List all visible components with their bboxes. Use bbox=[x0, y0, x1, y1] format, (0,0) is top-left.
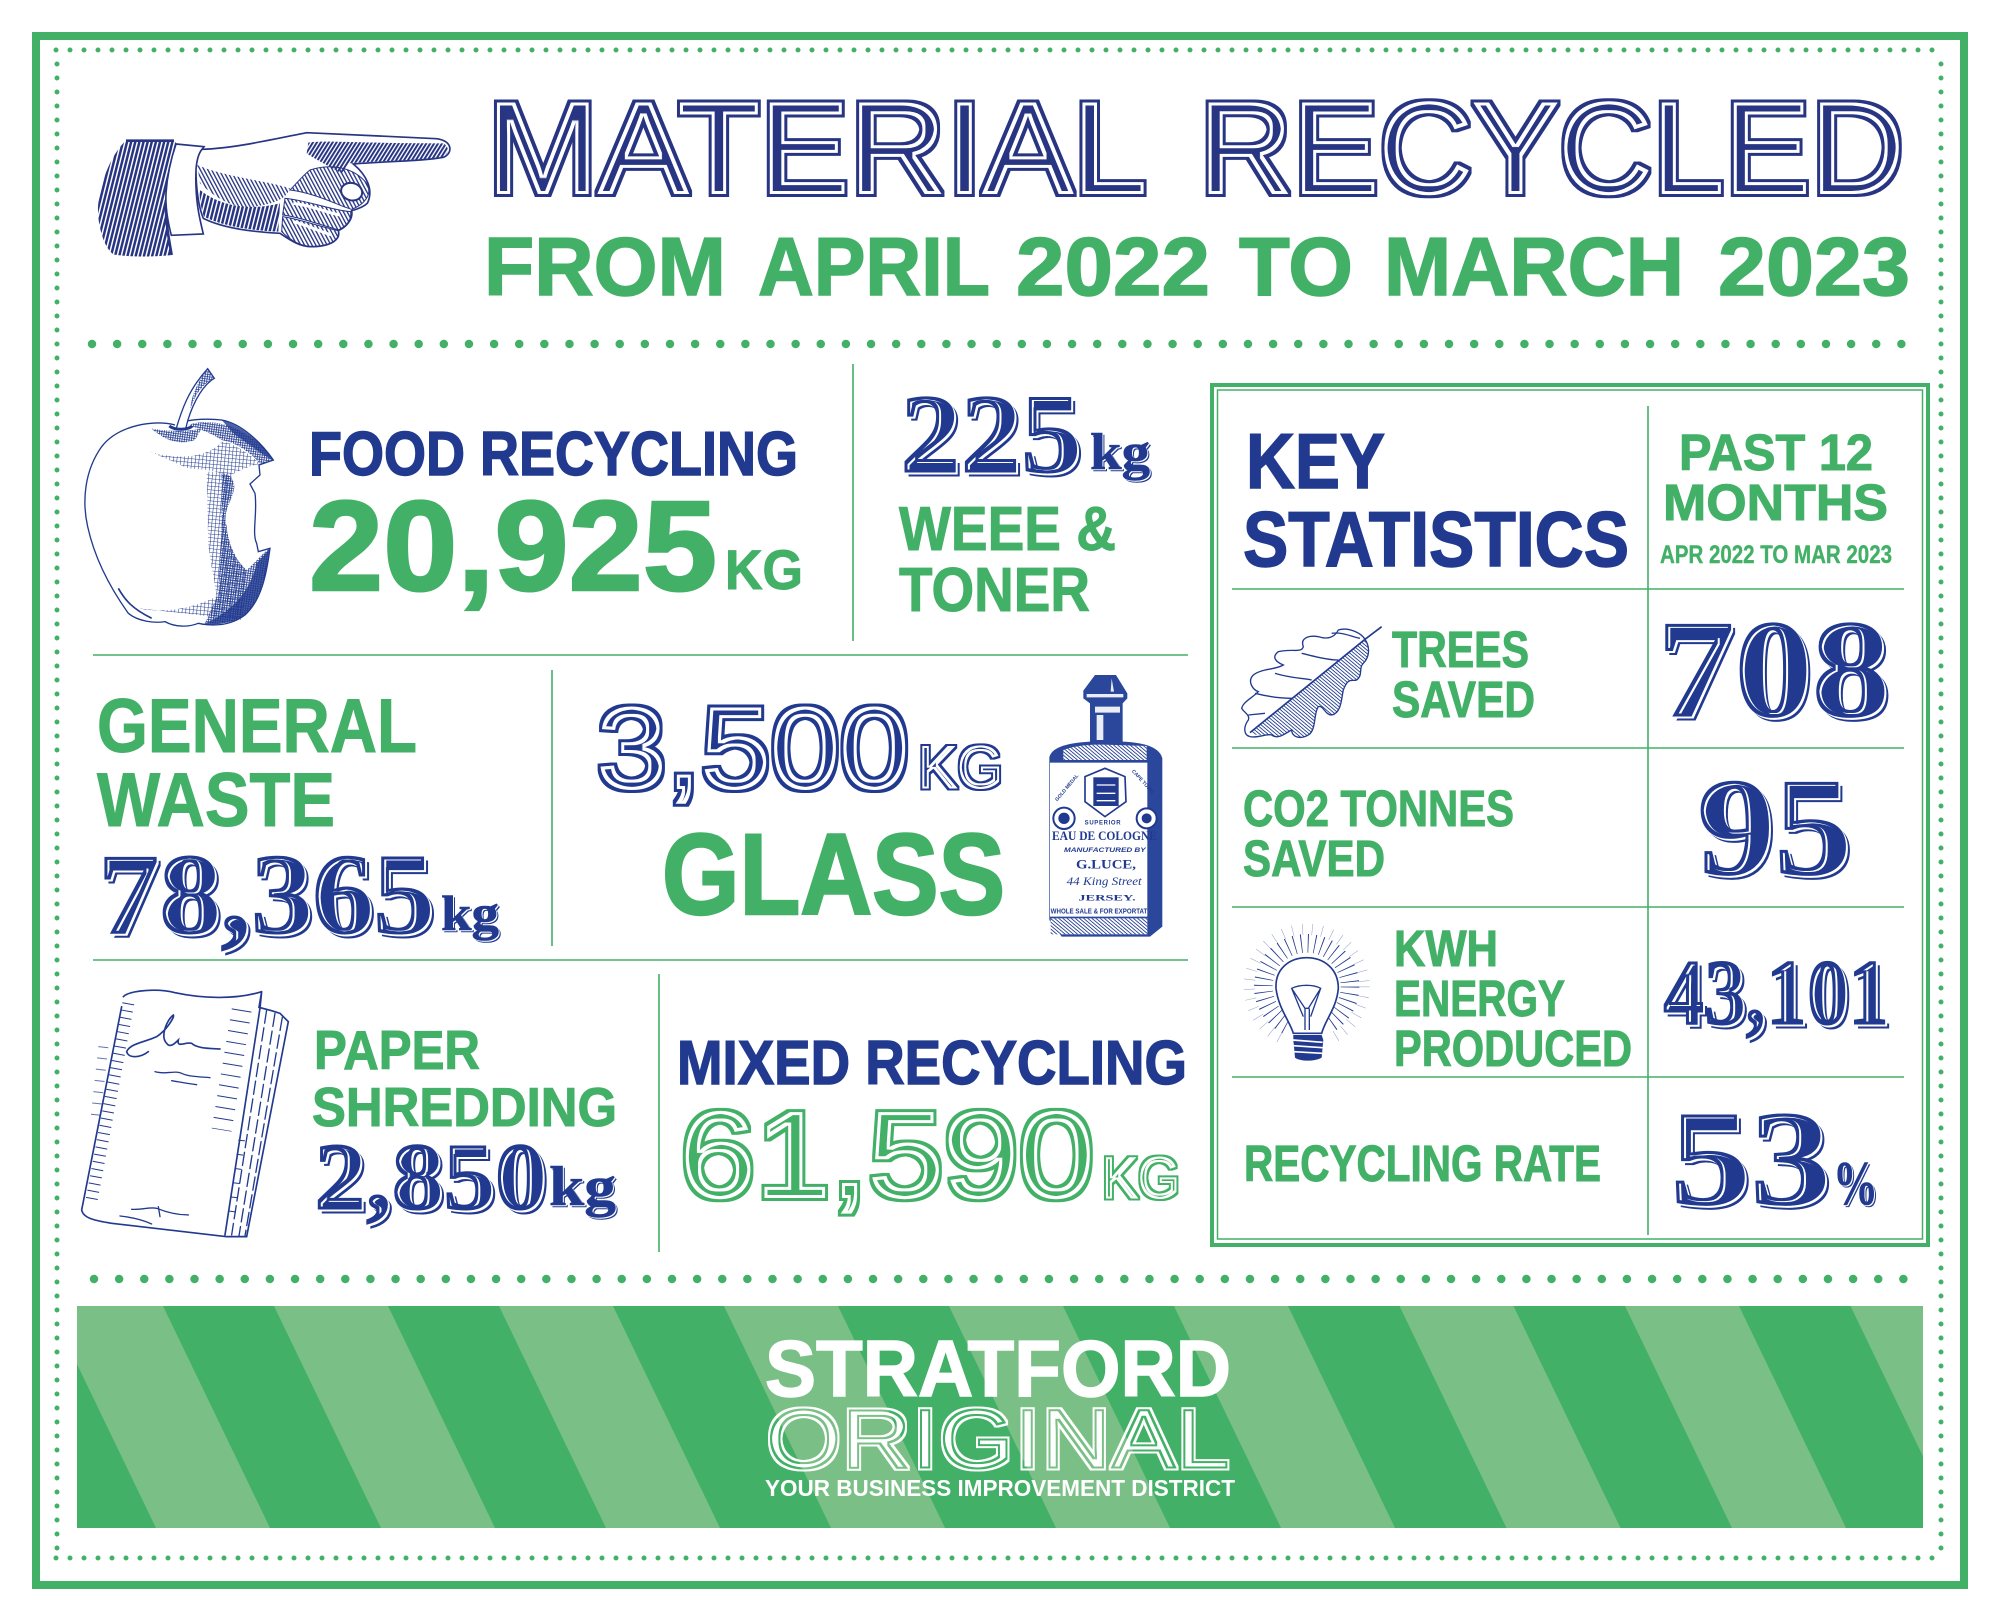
divider bbox=[93, 654, 1188, 656]
label: CO2 tonnes saved: CO2 TONNES bbox=[1243, 780, 1514, 837]
stat: general waste: WASTE bbox=[97, 758, 335, 843]
label: trees saved: SAVED bbox=[1392, 671, 1535, 728]
heading: past 12 months bbox=[1660, 424, 1892, 569]
icon: oak leaf bbox=[1242, 627, 1382, 737]
label: CO2 tonnes saved: SAVED bbox=[1243, 830, 1385, 887]
title: Material Recycled: MATERIAL bbox=[487, 75, 1147, 221]
icon: cologne bottle bbox=[1049, 675, 1162, 937]
stat: food recycling bbox=[309, 420, 803, 618]
icon: paper stack bbox=[82, 990, 288, 1237]
icon: bitten apple bbox=[85, 369, 274, 626]
value: 43,101: 43,101 bbox=[1663, 941, 1889, 1045]
value: 53% bbox=[1670, 1084, 1878, 1234]
heading: past 12 months: PAST 12 bbox=[1679, 424, 1873, 481]
value: 53%: 53 bbox=[1670, 1084, 1830, 1234]
divider bbox=[551, 670, 553, 946]
logo: Stratford Original bbox=[765, 1324, 1235, 1501]
heading: key statistics: STATISTICS bbox=[1243, 495, 1629, 583]
icon: cologne bottle: SUPERIOR bbox=[1085, 820, 1121, 826]
icon: cologne bottle: G.LUCE, bbox=[1076, 858, 1136, 872]
logo: Stratford Original: STRATFORD bbox=[765, 1324, 1231, 1413]
stat: WEEE and toner: 225 bbox=[900, 372, 1081, 497]
banner: striped footer bbox=[49, 1306, 2000, 1528]
stat: glass: GLASS bbox=[662, 811, 1005, 939]
label: trees saved: TREES bbox=[1392, 621, 1529, 678]
logo: Stratford Original: YOUR BUSINESS IMPROVEMENT DISTRICT bbox=[765, 1475, 1235, 1501]
divider bbox=[852, 364, 854, 641]
heading: past 12 months: MONTHS bbox=[1663, 474, 1888, 531]
stat: glass bbox=[597, 685, 1005, 939]
stat: mixed recycling: MIXED RECYCLING bbox=[677, 1029, 1187, 1098]
title: Material Recycled bbox=[487, 75, 1904, 221]
subtitle: date range: 2023 bbox=[1718, 220, 1910, 313]
stat: mixed recycling: KG bbox=[1102, 1146, 1180, 1211]
subtitle: date range: APRIL bbox=[758, 220, 990, 313]
icon: light bulb bbox=[1249, 929, 1364, 1061]
stat: general waste: GENERAL bbox=[97, 684, 417, 769]
stat: WEEE and toner: kg bbox=[1090, 424, 1150, 481]
icon: pointing hand bbox=[98, 133, 450, 256]
divider bbox=[658, 974, 660, 1252]
subtitle: date range: MARCH bbox=[1384, 220, 1684, 313]
divider bbox=[93, 959, 1188, 961]
logo: Stratford Original: ORIGINAL bbox=[766, 1392, 1230, 1486]
stat: glass: KG bbox=[918, 734, 1003, 801]
stat: general waste bbox=[97, 684, 499, 959]
title: Material Recycled: RECYCLED bbox=[1199, 75, 1904, 221]
icon: cologne bottle: GOLD MEDAL bbox=[1054, 773, 1080, 803]
heading: key statistics: KEY bbox=[1246, 417, 1385, 505]
stat: paper shredding: 2,850 bbox=[314, 1123, 546, 1230]
stat: paper shredding: SHREDDING bbox=[312, 1076, 617, 1138]
stat: WEEE and toner: TONER bbox=[899, 556, 1090, 625]
stat: WEEE and toner: WEEE & bbox=[899, 495, 1116, 564]
stat: general waste: kg bbox=[441, 885, 499, 941]
subtitle: date range: 2022 bbox=[1016, 220, 1210, 313]
value: 95: 95 bbox=[1697, 750, 1851, 905]
stat: glass: 3,500 bbox=[597, 685, 909, 813]
stat: paper shredding: PAPER bbox=[314, 1019, 480, 1081]
value: 708: 708 bbox=[1657, 592, 1889, 747]
stat: mixed recycling: 61,590 bbox=[680, 1087, 1094, 1223]
label: trees saved bbox=[1392, 621, 1535, 728]
icon: cologne bottle: WHOLE SALE & FOR EXPORTAT bbox=[1051, 907, 1148, 916]
icon: cologne bottle: MANUFACTURED BY bbox=[1064, 847, 1146, 854]
stat: paper shredding: kg bbox=[549, 1156, 616, 1218]
value: 53%: % bbox=[1833, 1150, 1878, 1218]
stat: mixed recycling bbox=[677, 1029, 1187, 1223]
label: kWh energy produced bbox=[1394, 920, 1632, 1077]
stat: general waste: 78,365 bbox=[98, 831, 434, 959]
icon: cologne bottle: EAU DE COLOGNE bbox=[1052, 828, 1157, 843]
heading: key statistics bbox=[1243, 417, 1629, 583]
label: kWh energy produced: ENERGY bbox=[1394, 970, 1565, 1027]
icon: cologne bottle: JERSEY. bbox=[1078, 893, 1136, 903]
label: CO2 tonnes saved bbox=[1243, 780, 1514, 887]
dotted divider bbox=[94, 1275, 1912, 1283]
stat: WEEE and toner bbox=[899, 372, 1150, 625]
icon: cologne bottle: CAPE TOWN bbox=[1130, 769, 1155, 796]
icon: cologne bottle: 44 King Street bbox=[1067, 876, 1143, 888]
stat: food recycling: 20,925 bbox=[309, 475, 717, 618]
heading: past 12 months: APR 2022 TO MAR 2023 bbox=[1660, 541, 1892, 569]
panel: key statistics bbox=[1212, 385, 1928, 1245]
stat: food recycling: KG bbox=[725, 538, 803, 601]
stat: paper shredding bbox=[312, 1019, 617, 1230]
label: kWh energy produced: KWH bbox=[1394, 920, 1498, 977]
subtitle: date range bbox=[484, 220, 1910, 313]
subtitle: date range: FROM bbox=[484, 220, 726, 313]
stat: food recycling: FOOD RECYCLING bbox=[309, 420, 798, 489]
subtitle: date range: TO bbox=[1239, 220, 1353, 313]
label: recycling rate: RECYCLING RATE bbox=[1244, 1135, 1601, 1192]
dotted divider bbox=[92, 340, 1908, 348]
label: kWh energy produced: PRODUCED bbox=[1394, 1020, 1632, 1077]
